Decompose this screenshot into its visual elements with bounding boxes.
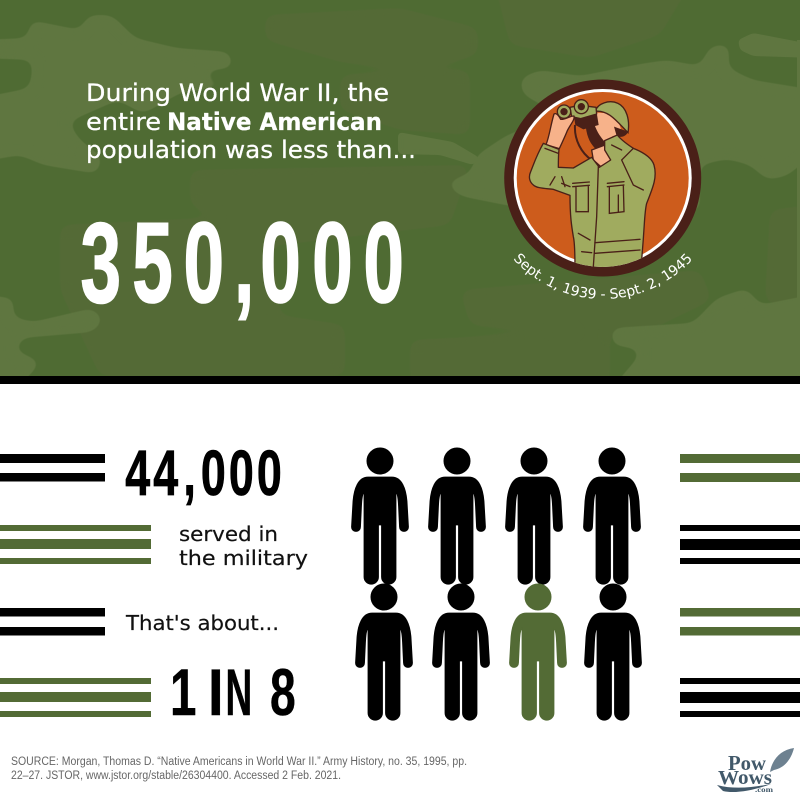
- big number: 350,000: 350,000: [80, 200, 404, 327]
- stat: 1 in 8: 1: [170, 656, 196, 730]
- black divider band: [0, 376, 800, 384]
- source citation: [11, 756, 467, 782]
- badge: soldier with binoculars: [504, 80, 702, 300]
- text: served in the military: served in: [179, 522, 278, 546]
- pictogram: 1 in 8 people: [352, 448, 642, 720]
- stripes: left green 1: [0, 525, 151, 564]
- logo: PowWows.com: [717, 748, 794, 794]
- logo: PowWows.com: Wows: [718, 767, 772, 789]
- heading: intro statement: During World War II, the: [86, 79, 389, 107]
- stripes: right green 2: [680, 608, 800, 636]
- heading: intro statement: entire: [86, 108, 161, 136]
- panel: camouflage header background: [0, 0, 800, 390]
- stripes: left black 1: [0, 454, 105, 482]
- stripes: right green 1: [680, 454, 800, 482]
- stat: 44,000: 44,000: [125, 437, 282, 509]
- stripes: right black 1: [680, 525, 800, 564]
- stat: 1 in 8: I: [208, 656, 224, 729]
- logo: PowWows.com: Pow: [728, 751, 767, 775]
- stripes: right black 2: [680, 678, 800, 717]
- stripes: left black 2: [0, 608, 105, 636]
- stripes: left green 2: [0, 678, 151, 717]
- logo: PowWows.com: .com: [755, 786, 773, 794]
- text: that's about: That's about...: [125, 611, 279, 635]
- source citation: SOURCE: Morgan, Thomas D. “Native Americans in World War II.” Army History, no. 35, 1995, pp.: [11, 756, 467, 768]
- source citation: 22–27. JSTOR, www.jstor.org/stable/26304400. Accessed 2 Feb. 2021.: [11, 770, 341, 782]
- heading: intro statement: [86, 79, 416, 164]
- heading: intro statement: Native American: [167, 108, 382, 136]
- stat: 1 in 8: [170, 656, 296, 730]
- heading: intro statement: population was less than...: [86, 136, 416, 164]
- date caption on curve: Sept. 1, 1939 - Sept. 2, 1945: [514, 253, 691, 300]
- stat: 1 in 8: N: [226, 657, 252, 730]
- text: served in the military: the military: [179, 546, 308, 570]
- text: served in the military: [179, 522, 308, 570]
- stat: 1 in 8: 8: [270, 656, 296, 730]
